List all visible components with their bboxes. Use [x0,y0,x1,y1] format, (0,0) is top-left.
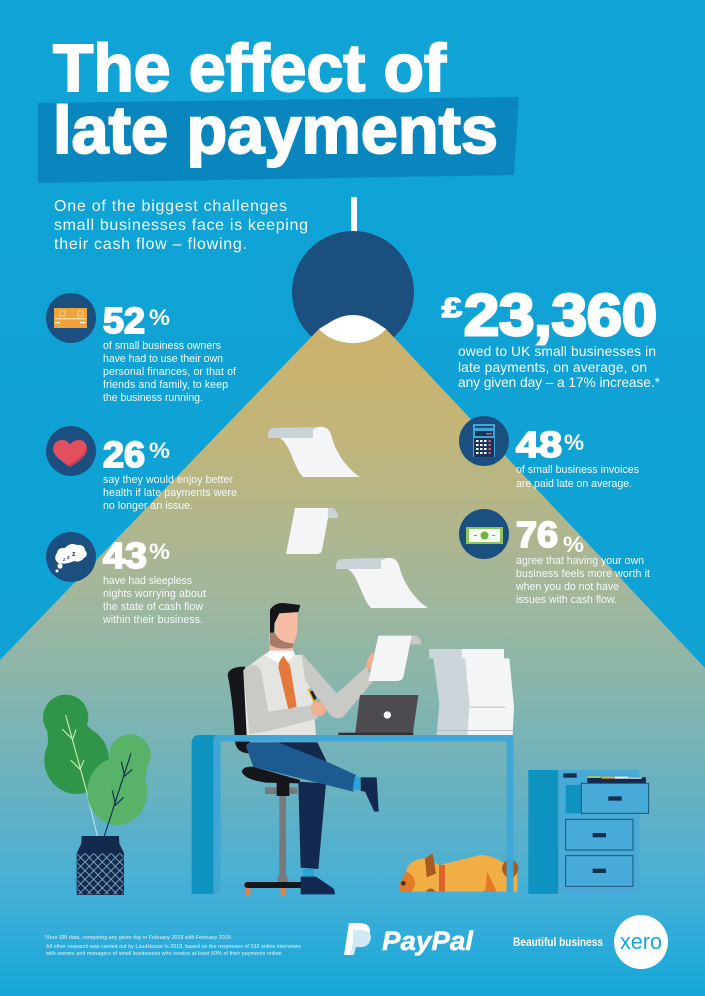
headline text [458,344,661,390]
stat text: agree that having your own [516,555,644,567]
Xero logo: xero [620,929,662,954]
PayPal wordmark: PayPal [382,926,474,956]
intro text: small businesses face is keeping [54,217,308,234]
vase [77,836,124,895]
dog collar [439,865,445,892]
stat 52% [46,293,236,404]
intro text: their cash flow – flowing. [54,236,247,253]
icon: sleep cloud: z [67,555,70,561]
desk [192,735,513,894]
laptop [338,695,418,735]
dark leaf stem [62,715,87,792]
stat text: health if late payments were [103,487,237,499]
vase lattice [77,853,123,894]
neck and head [269,603,300,654]
stat text [515,555,650,606]
intro text [54,198,308,253]
stat text: nights worrying about [103,588,206,600]
headline stat £23,360 [442,283,661,390]
lamp [292,197,414,353]
falling paper 3 [336,558,428,608]
stat text [103,474,237,512]
number 52: 52 [103,300,145,341]
stat text: no longer an issue. [103,500,193,512]
stat 26% [46,426,237,512]
intro text: One of the biggest challenges [54,198,287,215]
falling paper 1 [268,427,360,477]
stat text [102,575,206,626]
title [38,31,519,183]
stat text: of small business owners [103,340,221,352]
stat text: the state of cash flow [103,601,203,613]
icon: PayPal P [344,923,371,955]
stat text: the business running. [103,392,203,404]
plant [43,695,151,895]
number 48: 48 [516,424,562,465]
paper stack [429,649,514,735]
crossed leg [246,742,379,812]
icon: sleep cloud: z [63,557,66,562]
lamp bulb [319,315,386,343]
pen and hand [307,688,326,716]
stat text: friends and family, to keep [103,379,228,391]
files [587,776,646,784]
drawer 3 [566,856,633,886]
stat text: personal finances, or that of [103,366,236,378]
headline text: any given day – a 17% increase.* [458,375,661,390]
icon: heart [46,426,96,476]
stat text: within their business. [102,614,203,626]
percent sign: % [563,532,584,557]
dark leaf [43,695,109,794]
collar and tie [264,651,297,709]
falling paper 2 [286,508,338,554]
stat 43% [46,532,206,626]
icon: banknote [459,509,509,559]
percent sign: % [149,305,170,330]
standing leg [298,782,335,894]
icon: sleep cloud: z [72,551,76,558]
shirt [243,653,373,735]
dog spots [426,888,436,892]
number 23,360: 23,360 [464,283,657,348]
footnotes: All other research was carried out by LoudHouse in 2018, based on the responses of 532 online interviews [46,944,301,950]
dog ear [425,853,436,877]
near arm [243,665,318,734]
percent sign: % [564,430,584,455]
Xero logo [614,915,668,969]
stat 48% [459,416,639,490]
desk and worker [192,603,514,895]
stat text: have had to use their own [103,353,223,365]
stat text [103,340,236,404]
filing cabinet [528,770,649,894]
pound sign: £ [442,292,463,323]
stat text: say they would enjoy better [103,474,233,486]
open drawer [581,783,649,813]
icon: credit card [46,293,96,343]
chair [228,667,304,895]
number 76: 76 [516,514,558,555]
percent sign: % [149,539,170,564]
stat text: when you do not have [515,581,619,593]
light leaf stem [104,753,132,836]
footnotes: *Xero SBI data, comparing any given day in February 2018 with February 2019. [44,935,232,941]
stat text [516,464,639,490]
dog [400,853,518,892]
drawer 2 [566,819,633,850]
stat 76% [459,509,650,606]
hand-held paper [366,636,422,681]
stat text: are paid late on average. [516,478,632,490]
stat text: business feels more worth it [516,568,650,580]
PayPal logo [344,923,474,956]
footnotes [44,935,301,957]
number 43: 43 [103,535,147,576]
footnotes: with owners and managers of small businesses who invoice at least 50% of their payments online. [46,951,283,957]
title band [38,97,519,183]
headline text: owed to UK small businesses in [458,344,656,359]
dog head patch [400,872,415,892]
headline text: late payments, on average, on [458,360,647,375]
stat text: of small business invoices [516,464,639,476]
number 26: 26 [103,434,145,475]
stat text: issues with cash flow. [516,594,617,606]
light leaf [87,734,151,825]
icon: calculator [459,416,509,466]
stat text: have had sleepless [103,575,192,587]
light cone from lamp [0,329,705,996]
Beautiful business tagline: Beautiful business [513,935,603,949]
percent sign: % [149,438,170,463]
icon: sleep cloud [46,532,96,582]
title line 1: The effect of [53,31,447,106]
title line 2: late payments [53,93,498,168]
